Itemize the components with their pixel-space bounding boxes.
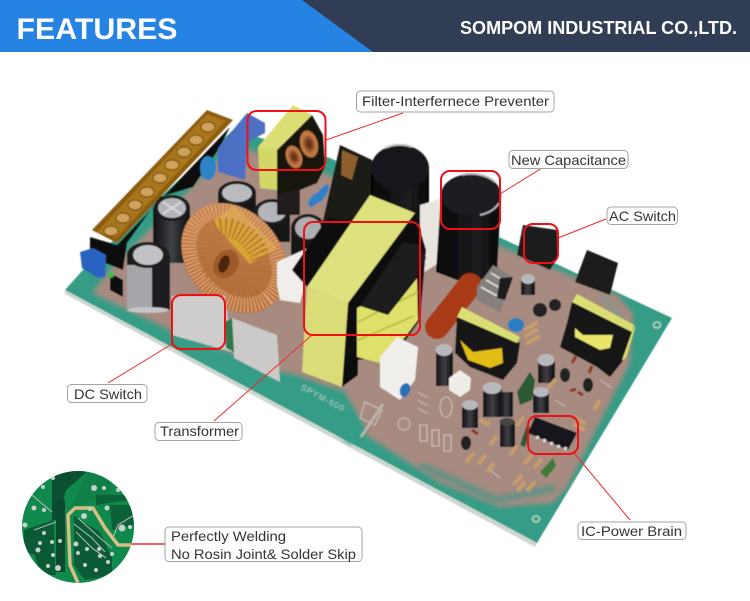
label: filter-interference preventer — [356, 91, 554, 112]
company name: SOMPOM INDUSTRIAL CO.,LTD. — [460, 18, 737, 38]
small bottom capacitors and parts — [360, 274, 612, 491]
paper insulation sheets — [172, 296, 280, 382]
heat sink — [477, 265, 513, 312]
board base — [65, 130, 672, 547]
filter-interference inductor — [258, 105, 325, 215]
red highlight frames — [172, 111, 578, 454]
blue disc capacitor — [200, 156, 216, 180]
terminal block — [90, 110, 233, 270]
large capacitor rear — [371, 145, 429, 228]
main transformer — [292, 195, 426, 387]
white cable sleeve — [420, 198, 443, 275]
leader lines — [108, 113, 630, 544]
header banner — [0, 0, 750, 52]
power supply circuit board photo — [65, 105, 672, 547]
heading: features: FEATURES — [16, 13, 178, 46]
board marking: SPYM-600 — [299, 382, 346, 413]
label: IC-power brain: IC-Power Brain — [581, 523, 682, 539]
blue X capacitor — [218, 113, 265, 180]
green LED — [110, 273, 123, 297]
large capacitor new capacitance — [436, 174, 501, 285]
small electrolytic capacitors — [127, 181, 325, 313]
label: AC switch: AC Switch — [609, 208, 676, 224]
white tape — [277, 247, 310, 303]
label: DC switch: DC Switch — [74, 386, 142, 402]
label: transformer: Transformer — [160, 423, 239, 439]
AC switch mosfets — [517, 225, 618, 295]
label: new capacitance: New Capacitance — [511, 152, 626, 168]
IC power brain chip — [528, 417, 577, 450]
blue trim pot — [80, 248, 106, 278]
white relay block — [380, 337, 418, 400]
label: perfectly welding: Perfectly Welding — [171, 528, 286, 544]
circular solder close-up — [22, 471, 134, 583]
label: perfectly welding — [165, 527, 362, 562]
small transformers — [455, 294, 636, 380]
copper toroid coil — [159, 182, 309, 334]
blue film parts — [306, 183, 332, 209]
red film capacitor — [437, 285, 470, 327]
label: filter-interference preventer: Filter-Interfernece Preventer — [362, 93, 549, 109]
label: perfectly welding: No Rosin Joint& Solder Skip — [171, 546, 356, 562]
rear power component — [322, 145, 372, 245]
